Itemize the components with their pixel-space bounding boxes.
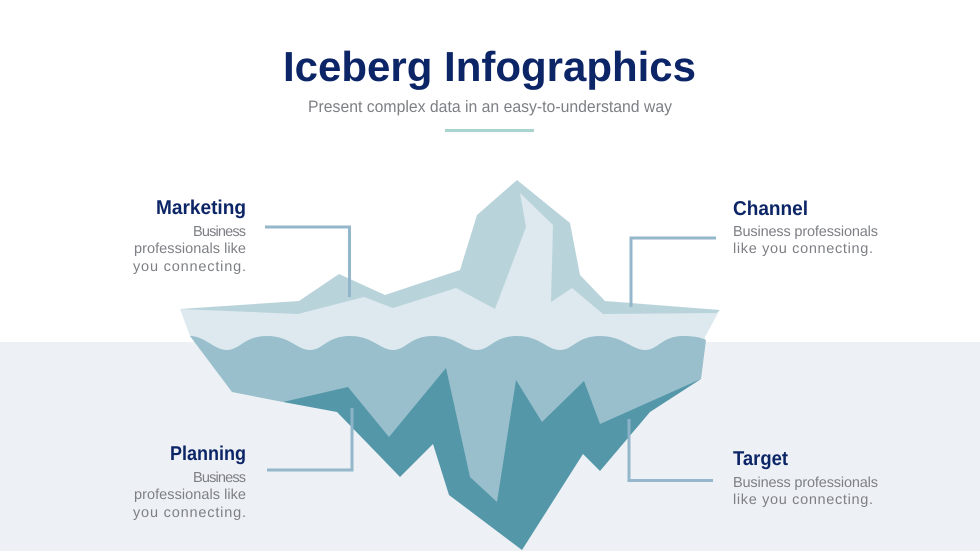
connector: Target <box>629 419 713 480</box>
text block: Planning: you connecting. <box>133 505 246 521</box>
title accent rule <box>445 129 534 132</box>
text block: Planning: professionals like <box>134 487 246 503</box>
subtitle: Present complex data in an easy-to-understand way <box>308 98 673 116</box>
text block: Planning <box>133 443 246 521</box>
text block: Channel <box>733 198 878 257</box>
connector: Marketing <box>265 227 350 297</box>
iceberg: mid-tone underwater mass with wave top <box>190 336 706 502</box>
iceberg: back peak <box>180 180 720 330</box>
iceberg: light ice face <box>180 193 718 350</box>
iceberg illustration <box>180 180 720 550</box>
text block: Marketing: Marketing <box>156 197 246 219</box>
text block: Planning: Planning <box>170 443 246 465</box>
connector: Planning <box>267 408 352 470</box>
connector: Channel <box>631 238 716 307</box>
text block: Marketing: professionals like <box>134 241 246 257</box>
text block: Target: Business professionals <box>733 475 878 491</box>
text block: Target: Target <box>733 448 788 470</box>
text block: Marketing: Business <box>193 224 246 240</box>
text block: Marketing: you connecting. <box>133 259 246 275</box>
title: Iceberg Infographics <box>283 43 696 90</box>
text block: Planning: Business <box>193 470 246 486</box>
iceberg: deep dark underwater mass <box>283 360 701 550</box>
text block: Channel: Channel <box>733 198 808 220</box>
text block: Marketing <box>133 197 246 275</box>
background: water band <box>0 342 980 551</box>
text block: Channel: like you connecting. <box>733 241 873 257</box>
text block: Target <box>733 448 878 508</box>
text block: Target: like you connecting. <box>733 492 873 508</box>
text block: Channel: Business professionals <box>733 224 878 240</box>
